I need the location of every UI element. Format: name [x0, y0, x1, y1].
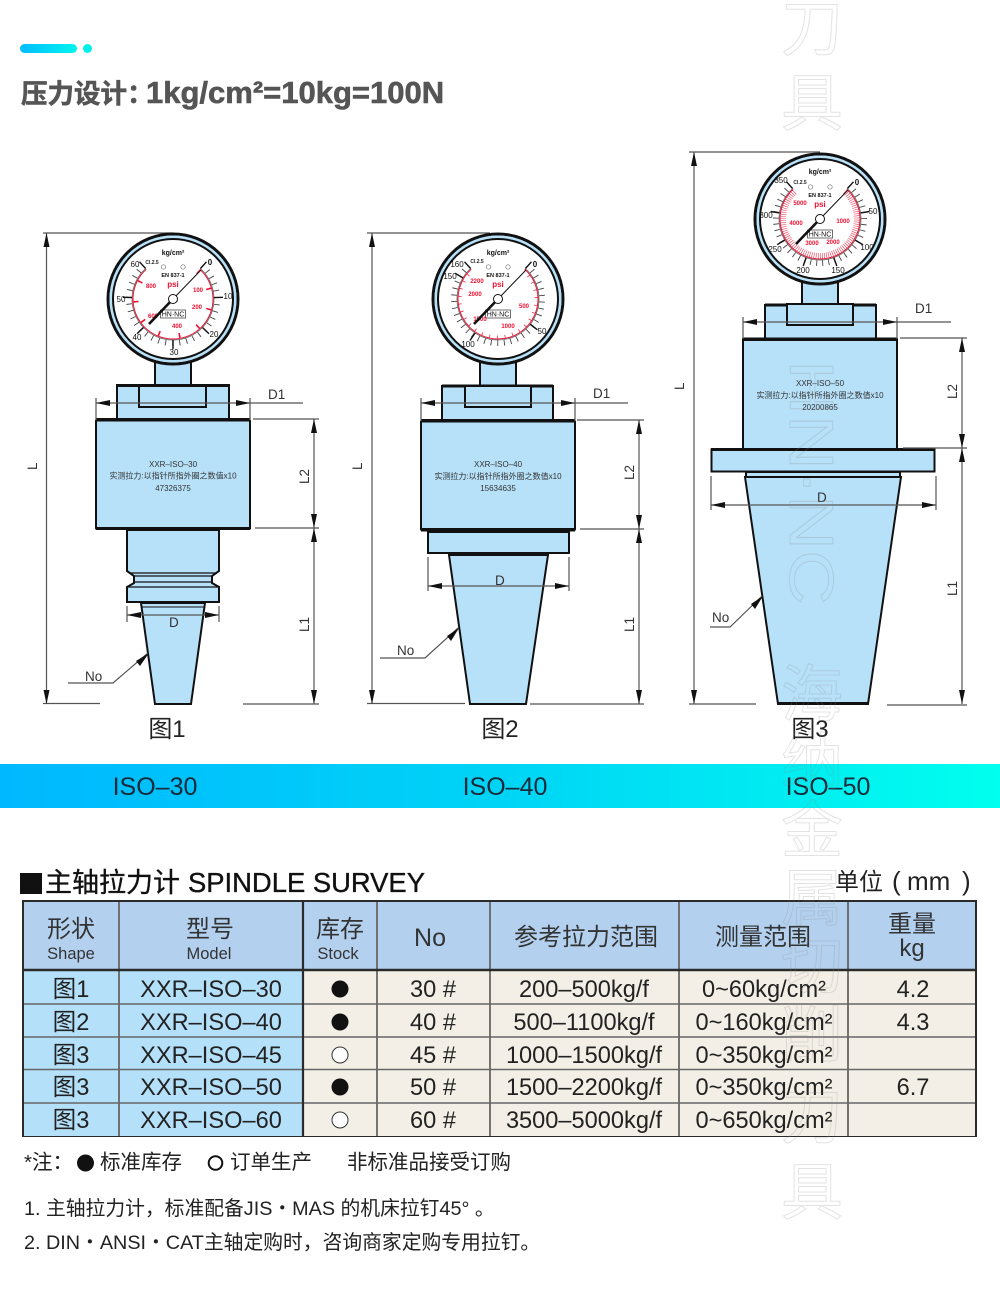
gauge figure 2: HN·NC	[487, 312, 509, 318]
dimension lines figure 1	[25, 233, 319, 704]
table row 3: 45 #	[410, 1043, 456, 1069]
gauge figure 2: 1500	[473, 317, 487, 323]
table row 3: XXR–ISO–45	[140, 1043, 282, 1069]
table header: 库存	[316, 916, 364, 943]
watermark: 具	[781, 1159, 843, 1228]
unit label: (	[892, 866, 901, 896]
watermark: 金	[781, 797, 843, 866]
watermark: 纳	[781, 729, 843, 798]
table row 4: 0~350kg/cm²	[695, 1075, 833, 1101]
gauge figure 2: Cl.2.5	[470, 259, 484, 265]
gauge figure 1: kg/cm²	[162, 250, 185, 257]
table row 4: 50 #	[410, 1075, 456, 1101]
gauge figure 2: 0	[533, 260, 538, 269]
accent bar	[20, 44, 92, 53]
dimension lines figure 2: No	[397, 643, 414, 658]
watermark	[776, 0, 845, 1228]
table row 3: 0~350kg/cm²	[695, 1043, 833, 1069]
unit label: mm	[907, 866, 950, 896]
gauge figure 3: 250	[768, 245, 782, 254]
gauge figure 3: 200	[796, 266, 810, 275]
gauge figure 3: EN 837-1	[808, 193, 832, 199]
unit label: 单位	[835, 869, 883, 896]
gauge figure 3: 4000	[789, 221, 803, 227]
table header	[47, 911, 936, 963]
watermark: 具	[781, 70, 843, 139]
footnote 1: 1. 主轴拉力计，标准配备JIS・MAS 的机床拉钉45° 。	[24, 1198, 495, 1220]
tool body figure 1	[96, 362, 250, 704]
gauge figure 1: 20	[210, 330, 219, 339]
tool body figure 2	[421, 362, 575, 704]
tool body figure 2: 15634635	[480, 484, 516, 493]
table row 5: XXR–ISO–60	[140, 1108, 282, 1134]
table row 5: 0~650kg/cm²	[695, 1108, 833, 1134]
table header: Model	[187, 945, 231, 963]
table row 3: 图3	[53, 1043, 89, 1069]
dimension lines figure 3: D1	[915, 301, 932, 316]
gauge figure 3: 300	[759, 211, 773, 220]
dimension lines figure 1: D	[169, 615, 179, 630]
table row 4	[53, 1075, 929, 1101]
gauge figure 1: 60	[131, 260, 140, 269]
table header: 重量	[888, 911, 936, 938]
spec table	[22, 900, 977, 1137]
tool body figure 1: XXR–ISO–30	[149, 460, 198, 469]
table row 2: 4.3	[897, 1010, 929, 1036]
table row 2: 500–1100kg/f	[513, 1010, 655, 1036]
legend note: 非标准品接受订购	[347, 1151, 511, 1174]
dimension lines figure 1: L2	[297, 469, 312, 484]
gauge figure 2	[433, 234, 563, 364]
dimension lines figure 1: No	[85, 669, 102, 684]
table row 5: 3500–5000kg/f	[506, 1108, 663, 1134]
gauge figure 1: 100	[193, 288, 204, 294]
title: pressure design: 1kg/cm²=10kg=100N	[146, 75, 444, 110]
tool body figure 2: XXR–ISO–40	[474, 460, 523, 469]
gauge figure 3: 0	[855, 178, 860, 187]
gauge figure 3: 50	[869, 207, 878, 216]
table row 1: 0~60kg/cm²	[702, 977, 826, 1003]
gauge figure 1: 400	[172, 324, 183, 330]
dimension lines figure 2: L	[350, 462, 365, 470]
watermark: HN·NC	[776, 360, 845, 605]
tool body figure 3: 20200865	[802, 403, 838, 412]
table row 2	[53, 1010, 929, 1036]
gauge figure 1: HN·NC	[162, 312, 184, 318]
legend note	[24, 1151, 511, 1174]
dimension lines figure 2: L2	[622, 465, 637, 480]
caption figure 2: 图2	[481, 716, 519, 743]
table backgrounds	[22, 900, 977, 1137]
table row 5	[53, 1108, 833, 1134]
table header: 形状	[47, 916, 95, 943]
table row 4: XXR–ISO–50	[140, 1075, 282, 1101]
dimension lines figure 1: D1	[268, 387, 285, 402]
gauge figure 2: 500	[519, 304, 530, 310]
table header: Shape	[47, 945, 95, 963]
table row 5: 图3	[53, 1108, 89, 1134]
legend note: *注：	[24, 1151, 73, 1174]
footnote 2: 2. DIN・ANSI・CAT主轴定购时，咨询商家定购专用拉钉。	[24, 1232, 540, 1254]
gauge figure 3: 150	[831, 266, 845, 275]
tool body figure 1: 实测拉力:以指针所指外圈之数值x10	[109, 470, 237, 480]
caption figure 3: 图3	[791, 716, 829, 743]
gauge figure 3: 350	[774, 176, 788, 185]
tool body figure 3	[711, 282, 935, 705]
table row 3	[53, 1043, 833, 1069]
model band: ISO–30	[113, 773, 197, 801]
table row 4: 图3	[53, 1075, 89, 1101]
gauge figure 1: 200	[192, 305, 203, 311]
table row 1	[53, 977, 929, 1003]
gauge figure 1: 600	[148, 314, 159, 320]
table row 2: 40 #	[410, 1010, 456, 1036]
dimension lines figure 3: L	[672, 382, 687, 390]
dimension lines figure 3: L1	[945, 581, 960, 596]
gauge figure 3: psi	[814, 200, 826, 209]
dimension lines figure 2: D	[495, 573, 505, 588]
legend note: 标准库存	[100, 1151, 182, 1174]
table header: No	[414, 924, 446, 952]
dimension lines figure 3: No	[712, 610, 729, 625]
watermark: 海	[781, 661, 843, 730]
dimension lines figure 3	[672, 152, 967, 705]
model band: ISO–40	[463, 773, 547, 801]
gauge figure 3: 1000	[836, 219, 850, 225]
dimension lines figure 2	[350, 233, 644, 704]
tool body figure 3: XXR–ISO–50	[796, 379, 845, 388]
dimension lines figure 1: L1	[297, 617, 312, 632]
table heading	[20, 867, 425, 898]
tool body figure 1: 47326375	[155, 484, 191, 493]
figure 1: ISO-30 gauge drawing	[25, 233, 319, 743]
table row 3: 1000–1500kg/f	[506, 1043, 663, 1069]
gauge figure 2: 50	[538, 327, 547, 336]
table header: 测量范围	[715, 924, 811, 951]
watermark: 刀	[781, 1083, 843, 1152]
table row 4: 1500–2200kg/f	[506, 1075, 663, 1101]
gauge figure 2: 1000	[501, 324, 515, 330]
table header: Stock	[317, 945, 359, 963]
dimension lines figure 2: D1	[593, 386, 610, 401]
gauge figure 2: EN 837-1	[486, 273, 510, 279]
gauge figure 2: 2000	[468, 292, 482, 298]
table row 4: 6.7	[897, 1075, 929, 1101]
model band	[0, 764, 1000, 808]
table header: kg	[899, 935, 925, 962]
gauge figure 3: 3000	[805, 241, 819, 247]
gauge figure 1: 10	[224, 292, 233, 301]
table row 1: 30 #	[410, 977, 456, 1003]
table row 1: 4.2	[897, 977, 929, 1003]
gauge figure 2: psi	[492, 280, 504, 289]
gauge figure 2: 160	[450, 260, 464, 269]
gauge figure 1: EN 837-1	[161, 273, 185, 279]
table row 1: XXR–ISO–30	[140, 977, 282, 1003]
table row 1: 图1	[53, 977, 89, 1003]
gauge figure 2: kg/cm²	[487, 250, 510, 257]
table row 5: 60 #	[410, 1108, 456, 1134]
watermark: 属	[781, 865, 843, 934]
table row 2: XXR–ISO–40	[140, 1010, 282, 1036]
table row 2: 图2	[53, 1010, 89, 1036]
dimension lines figure 3: D	[817, 490, 827, 505]
gauge figure 1: 40	[133, 333, 142, 342]
gauge figure 1: 800	[146, 284, 157, 290]
gauge figure 2: 150	[443, 272, 457, 281]
table header: 参考拉力范围	[514, 924, 658, 951]
title: pressure design: 压力设计：	[21, 79, 154, 109]
dimension lines figure 1: L	[25, 462, 40, 470]
table heading: 主轴拉力计	[45, 868, 180, 898]
gauge figure 3: 100	[860, 243, 874, 252]
table row 2: 0~160kg/cm²	[695, 1010, 833, 1036]
caption figure 1: 图1	[148, 716, 186, 743]
figure 2: ISO-40 gauge drawing	[350, 233, 644, 743]
table row 1: 200–500kg/f	[519, 977, 649, 1003]
table heading: SPINDLE SURVEY	[188, 867, 425, 898]
gauge figure 1: Cl.2.5	[145, 260, 159, 266]
gauge figure 3: HN·NC	[809, 232, 831, 238]
tool body figure 2: 实测拉力:以指针所指外圈之数值x10	[434, 471, 562, 481]
gauge figure 1: psi	[167, 280, 179, 289]
gauge figure 3: Cl.2.5	[793, 180, 807, 186]
gauge figure 1: 0	[208, 258, 213, 267]
figure 3: ISO-50 gauge drawing	[672, 152, 967, 743]
model band: ISO–50	[786, 773, 870, 801]
gauge figure 1	[108, 234, 238, 364]
tool body figure 3: 实测拉力:以指针所指外圈之数值x10	[756, 390, 884, 400]
watermark: 切	[781, 933, 843, 1002]
dimension lines figure 3: L2	[945, 384, 960, 399]
gauge figure 2: 2200	[470, 279, 484, 285]
unit label: )	[962, 866, 971, 896]
table header: 型号	[186, 916, 234, 943]
legend note: 订单生产	[230, 1151, 312, 1174]
gauge figure 3	[755, 154, 885, 284]
gauge figure 1: 50	[117, 295, 126, 304]
gauge figure 3: kg/cm²	[809, 169, 832, 176]
watermark: 削	[781, 1001, 843, 1070]
dimension lines figure 2: L1	[622, 617, 637, 632]
gauge figure 2: 100	[461, 340, 475, 349]
gauge figure 1: 30	[170, 348, 179, 357]
gauge figure 3: 2000	[826, 240, 840, 246]
gauge figure 3: 5000	[793, 201, 807, 207]
